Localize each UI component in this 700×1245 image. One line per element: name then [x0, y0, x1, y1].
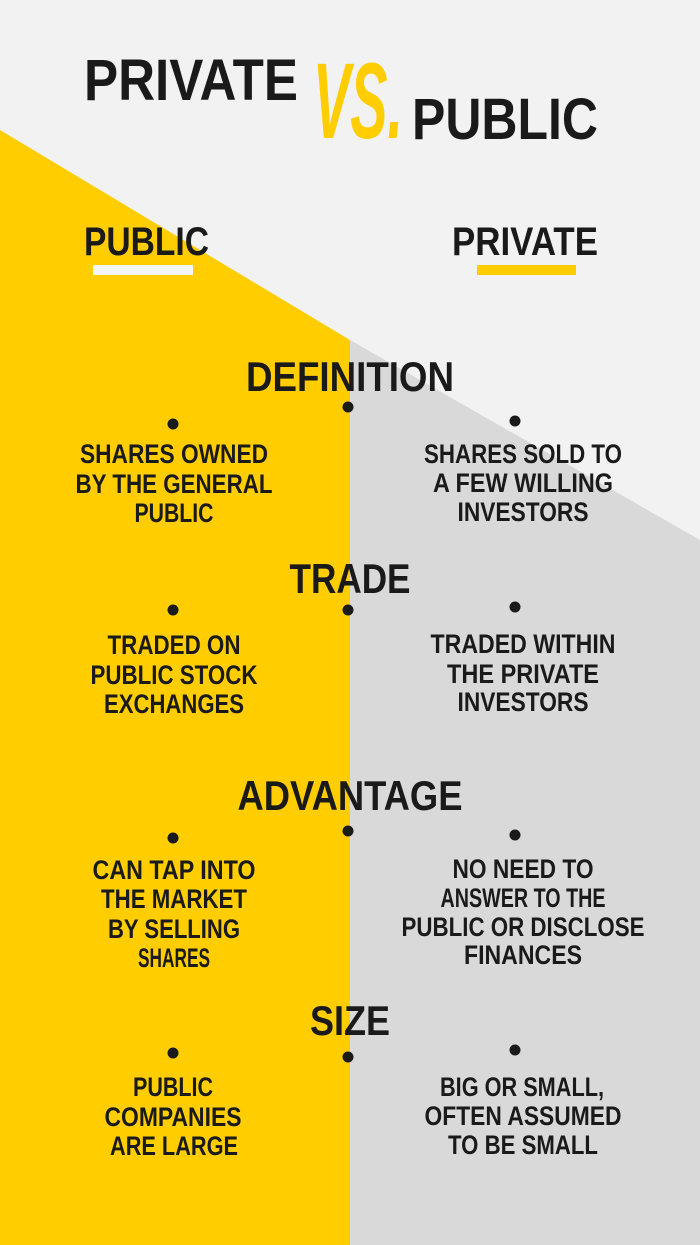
heading: public: PUBLIC: [84, 220, 209, 264]
section: definition: SHARES OWNED: [80, 439, 268, 469]
section: size: [104, 997, 622, 1161]
heading: private: PRIVATE: [452, 220, 598, 264]
section: advantage: BY SELLING: [108, 914, 240, 944]
section: advantage: NO NEED TO: [452, 854, 594, 884]
section: advantage: PUBLIC OR DISCLOSE: [402, 912, 644, 942]
section: advantage: FINANCES: [464, 940, 582, 970]
section: definition: INVESTORS: [458, 497, 588, 527]
section: advantage: CAN TAP INTO: [92, 855, 256, 885]
section: trade: EXCHANGES: [104, 689, 244, 719]
section: definition: SHARES SOLD TO: [424, 439, 622, 469]
section: trade: PUBLIC STOCK: [90, 660, 258, 690]
section: definition: [76, 353, 622, 528]
section: definition: PUBLIC: [134, 498, 214, 528]
section: trade: [90, 555, 616, 719]
section: advantage: [92, 772, 644, 973]
section: trade: TRADED ON: [108, 630, 240, 660]
section: trade: TRADED WITHIN: [430, 629, 616, 659]
section: trade: TRADE: [290, 555, 410, 602]
yellow public background: [0, 130, 350, 1245]
title: PRIVATE: [84, 48, 298, 113]
title: [84, 40, 598, 161]
gray private background: [350, 340, 700, 1245]
section: size: PUBLIC: [133, 1072, 213, 1102]
section: advantage: THE MARKET: [101, 884, 247, 914]
section: advantage: SHARES: [138, 943, 210, 973]
section: trade: THE PRIVATE: [447, 659, 599, 689]
section: definition: DEFINITION: [246, 353, 454, 400]
section: size: OFTEN ASSUMED: [424, 1101, 622, 1131]
section: definition: A FEW WILLING: [433, 468, 613, 498]
title: VS.: [313, 40, 403, 161]
section: size: BIG OR SMALL,: [440, 1072, 604, 1102]
section: size: COMPANIES: [104, 1102, 242, 1132]
section: trade: INVESTORS: [458, 687, 588, 717]
heading: public: [84, 220, 209, 275]
section: advantage: ADVANTAGE: [238, 772, 462, 819]
section: size: TO BE SMALL: [448, 1130, 598, 1160]
section: definition: BY THE GENERAL: [76, 469, 272, 499]
section: size: SIZE: [310, 997, 390, 1044]
section: size: ARE LARGE: [110, 1131, 238, 1161]
title: PUBLIC: [412, 87, 598, 152]
section: advantage: ANSWER TO THE: [440, 883, 606, 913]
